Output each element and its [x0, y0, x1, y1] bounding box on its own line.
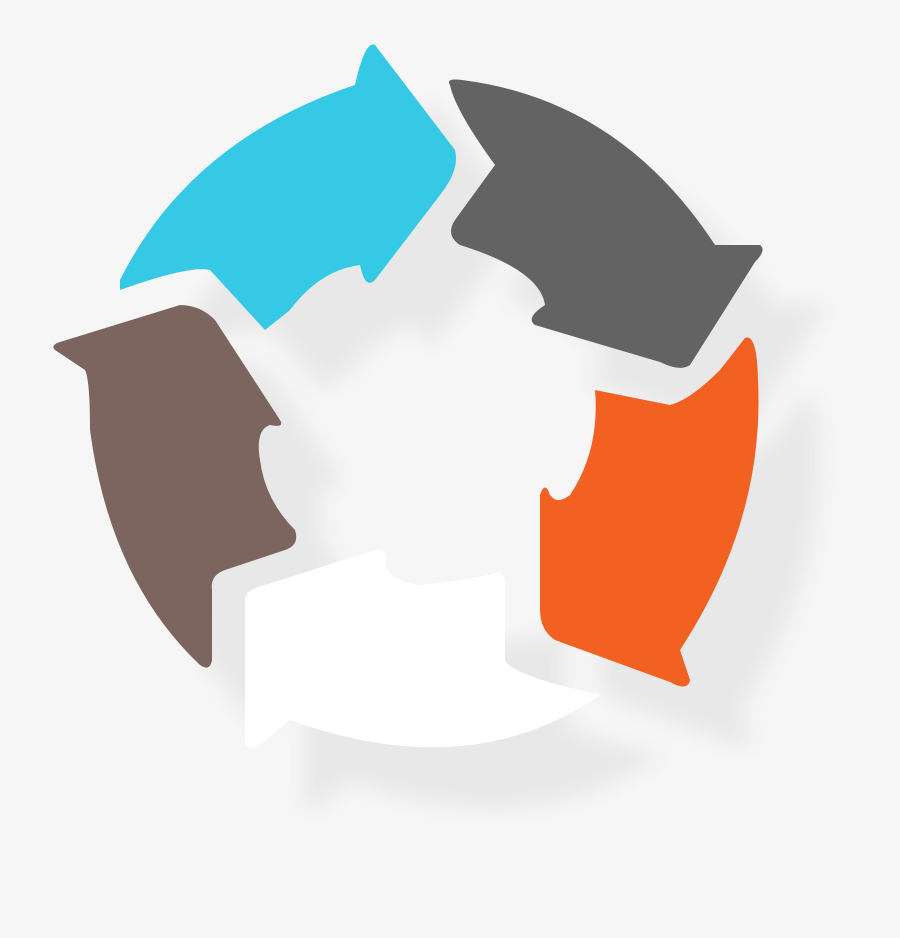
arrow: brown	[53, 305, 296, 668]
arrow: orange	[540, 338, 759, 687]
arrow: blue	[120, 44, 456, 330]
arrow: dark gray	[449, 80, 763, 368]
shadows	[113, 104, 823, 808]
arrow: white	[245, 550, 600, 748]
